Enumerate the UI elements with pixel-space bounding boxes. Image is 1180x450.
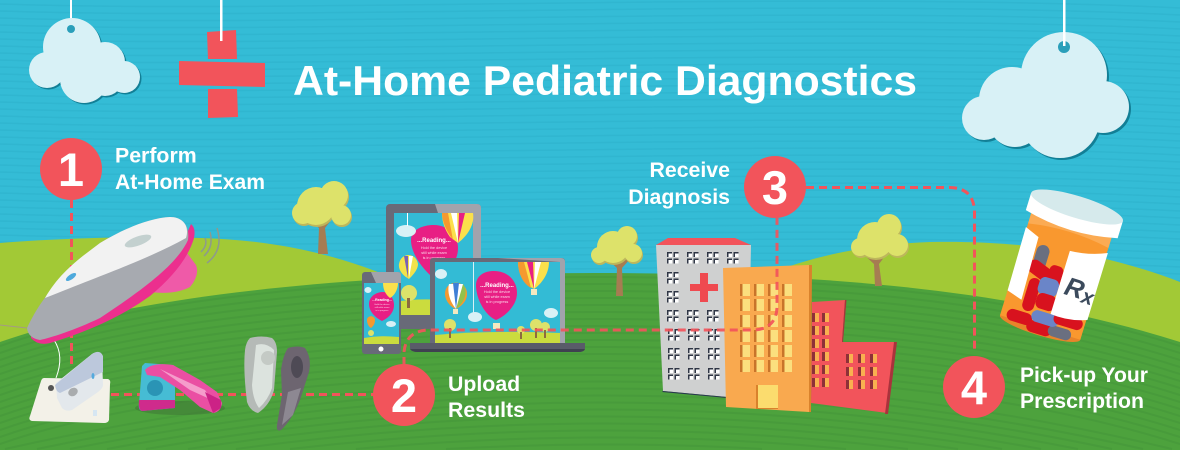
step 3 badge: [744, 156, 806, 218]
tree left: [292, 181, 352, 254]
back hills: [0, 237, 1180, 360]
tablet with app screen: Hold the device: [421, 246, 447, 250]
balloon tablet pink: [411, 225, 458, 280]
orange main building: [723, 265, 812, 412]
bottle cap: [1024, 182, 1126, 244]
step 1 badge: 1: [58, 143, 84, 196]
step 3 label: Receive: [649, 158, 730, 182]
step 1 label: At-Home Exam: [115, 170, 265, 194]
phone with app screen: is in progress: [375, 309, 389, 312]
icon: split red cross: [179, 0, 265, 118]
phone with app screen: ...Reading...: [372, 298, 392, 302]
step 3 label: [628, 158, 730, 209]
dashed line: step 3 to step 4: [806, 188, 974, 352]
phone with app screen: [362, 272, 401, 354]
step 2 label: [448, 372, 525, 422]
laptop with app screen: ...Reading...: [480, 283, 514, 289]
laptop with app screen: Hold the device: [484, 290, 510, 294]
laptop with app screen: [410, 258, 585, 352]
pink and blue device: [135, 363, 225, 415]
hospital grey tower: [656, 238, 751, 398]
step 2 label: Results: [448, 398, 525, 422]
step 2 badge: [373, 364, 435, 426]
Rx mark: x: [1078, 285, 1098, 311]
open grey handset device: [244, 336, 310, 430]
tablet with app screen: is in progress: [423, 256, 445, 260]
step 4 badge: [943, 356, 1005, 418]
step 2 label: Upload: [448, 372, 520, 396]
phone with app screen: Hold the device: [374, 303, 390, 306]
step 3 badge: 3: [762, 161, 788, 214]
icon: hospital cross: [690, 273, 718, 302]
hanging cloud left: [29, 0, 142, 104]
front hill: [0, 273, 1180, 450]
pad with small device: [29, 340, 110, 423]
tree right: [851, 214, 909, 286]
sky background: [0, 0, 1180, 290]
step 1 badge: [40, 138, 102, 200]
laptop with app screen: still while exam: [484, 295, 510, 299]
tablet with app screen: still while exam: [421, 251, 447, 255]
phone with app screen: still while exam: [375, 306, 390, 309]
prescription label: [1004, 227, 1109, 325]
dashed line: step 1 to step 2: [72, 200, 375, 394]
capsules: [1004, 240, 1102, 346]
Rx mark: R: [1061, 271, 1088, 305]
dashed line: step 2 to step 3: [404, 218, 777, 365]
tablet with app screen: [386, 204, 481, 329]
step 4 label: [1020, 364, 1148, 413]
tree middle: [591, 226, 643, 296]
step 1 label: Perform: [115, 144, 197, 168]
step 3 label: Diagnosis: [628, 185, 730, 209]
step 2 badge: 2: [391, 369, 417, 422]
title: At-Home Pediatric Diagnostics: [293, 57, 917, 104]
large handheld exam device: [0, 217, 219, 344]
pill bottle: [992, 182, 1126, 349]
hanging cloud right: [962, 0, 1131, 160]
laptop with app screen: is in progress: [486, 300, 508, 304]
step 4 label: Prescription: [1020, 390, 1144, 413]
step 4 label: Pick-up Your: [1020, 364, 1148, 387]
step 1 label: [115, 144, 265, 194]
tablet with app screen: ...Reading...: [417, 238, 451, 244]
step 4 badge: 4: [961, 361, 987, 414]
red wing buildings: [811, 300, 897, 414]
